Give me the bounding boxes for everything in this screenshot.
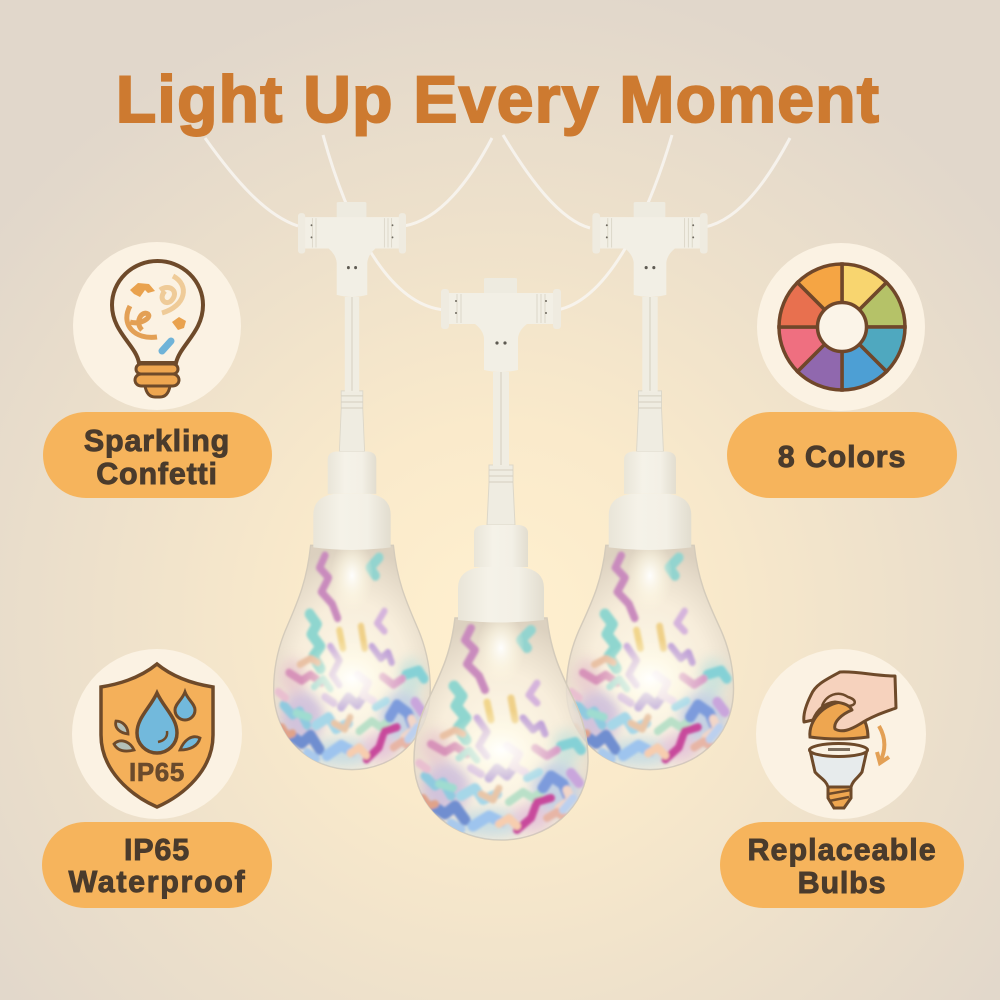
label: sparkling confetti: Confetti bbox=[96, 457, 218, 491]
wires bbox=[205, 135, 790, 310]
feature: sparkling confetti bbox=[43, 242, 272, 498]
label: replaceable bulbs: Bulbs bbox=[798, 866, 886, 900]
title: Light Up Every Moment bbox=[116, 62, 880, 136]
feature: replaceable bulbs bbox=[720, 649, 964, 908]
right light bulb bbox=[566, 202, 734, 770]
label: sparkling confetti bbox=[43, 412, 272, 498]
icon: IP65 shield bbox=[72, 649, 242, 819]
label: replaceable bulbs bbox=[720, 822, 964, 908]
label: IP65 waterproof: Waterproof bbox=[68, 865, 246, 899]
label: sparkling confetti: Sparkling bbox=[84, 424, 230, 458]
icon: IP65 shield: IP65 bbox=[129, 757, 185, 787]
icon: color wheel bbox=[757, 243, 925, 411]
center light bulb bbox=[414, 278, 588, 840]
feature: 8 colors bbox=[727, 243, 957, 498]
icon: confetti light bulb bbox=[73, 242, 241, 410]
label: IP65 waterproof: IP65 bbox=[124, 833, 190, 867]
label: 8 colors: 8 Colors bbox=[778, 440, 906, 474]
label: IP65 waterproof bbox=[42, 822, 272, 908]
left light bulb bbox=[274, 202, 430, 770]
label: replaceable bulbs: Replaceable bbox=[748, 833, 936, 867]
feature: IP65 waterproof bbox=[42, 649, 272, 908]
icon: hand replacing bulb bbox=[756, 649, 926, 819]
label: 8 colors bbox=[727, 412, 957, 498]
